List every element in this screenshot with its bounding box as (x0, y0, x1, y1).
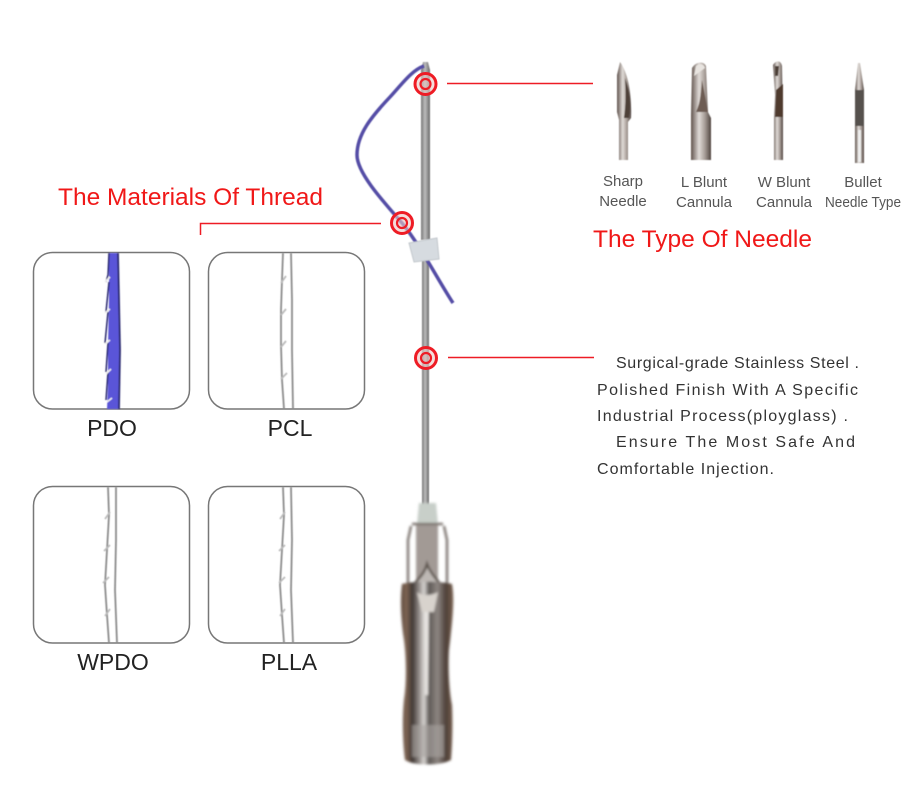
needle shaft (421, 62, 430, 508)
card: PCL (208, 252, 364, 409)
card: WPDO (34, 486, 190, 643)
icon: bullet needle (855, 63, 864, 163)
caption: L blunt cannula (676, 174, 733, 211)
caption: W blunt cannula: Cannula (756, 194, 813, 211)
card: PDO (34, 252, 190, 409)
target: needle tip (415, 74, 436, 94)
thread clip (409, 238, 439, 262)
icon: L blunt cannula (691, 62, 711, 160)
text block: stainless steel description: Surgical-grade Stainless Steel . (616, 355, 859, 372)
text block: stainless steel description: Ensure The Most Safe And (616, 434, 855, 451)
caption: bullet needle type: Needle Type (825, 194, 901, 211)
text block: stainless steel description (597, 355, 859, 478)
icon: W blunt cannula (773, 61, 783, 160)
panel: needle types (593, 61, 901, 253)
caption: sharp needle (599, 173, 647, 210)
leader line: materials (200, 224, 381, 235)
caption: W blunt cannula (756, 174, 813, 211)
label: PLLA: PLLA (261, 649, 318, 675)
caption: bullet needle type: Bullet (844, 174, 883, 191)
heading: type of needle: The Type Of Needle (593, 226, 812, 253)
panel: thread materials (34, 184, 381, 675)
caption: bullet needle type (825, 174, 901, 211)
caption: L blunt cannula: Cannula (676, 194, 733, 211)
label: PDO: PDO (87, 415, 137, 441)
heading: materials of thread: The Materials Of Thread (58, 184, 323, 211)
target: shaft (416, 348, 436, 368)
icon: sharp needle (617, 62, 631, 160)
target: thread (392, 212, 412, 234)
handle assembly (401, 503, 453, 764)
card: PLLA (208, 486, 364, 643)
illustration: thread lifting needle (357, 62, 453, 764)
label: PCL: PCL (268, 415, 313, 441)
caption: sharp needle: Needle (599, 193, 647, 210)
label: WPDO: WPDO (77, 649, 149, 675)
blue thread (357, 66, 453, 303)
caption: L blunt cannula: L Blunt (681, 174, 728, 191)
leader line: needle types (447, 82, 593, 84)
text block: stainless steel description: Polished Finish With A Specific (597, 382, 858, 399)
text block: stainless steel description: Comfortable Injection. (597, 461, 774, 478)
caption: W blunt cannula: W Blunt (758, 174, 811, 191)
leader line: stainless steel (448, 356, 594, 358)
text block: stainless steel description: Industrial Process(ployglass) . (597, 408, 848, 425)
caption: sharp needle: Sharp (603, 173, 643, 190)
